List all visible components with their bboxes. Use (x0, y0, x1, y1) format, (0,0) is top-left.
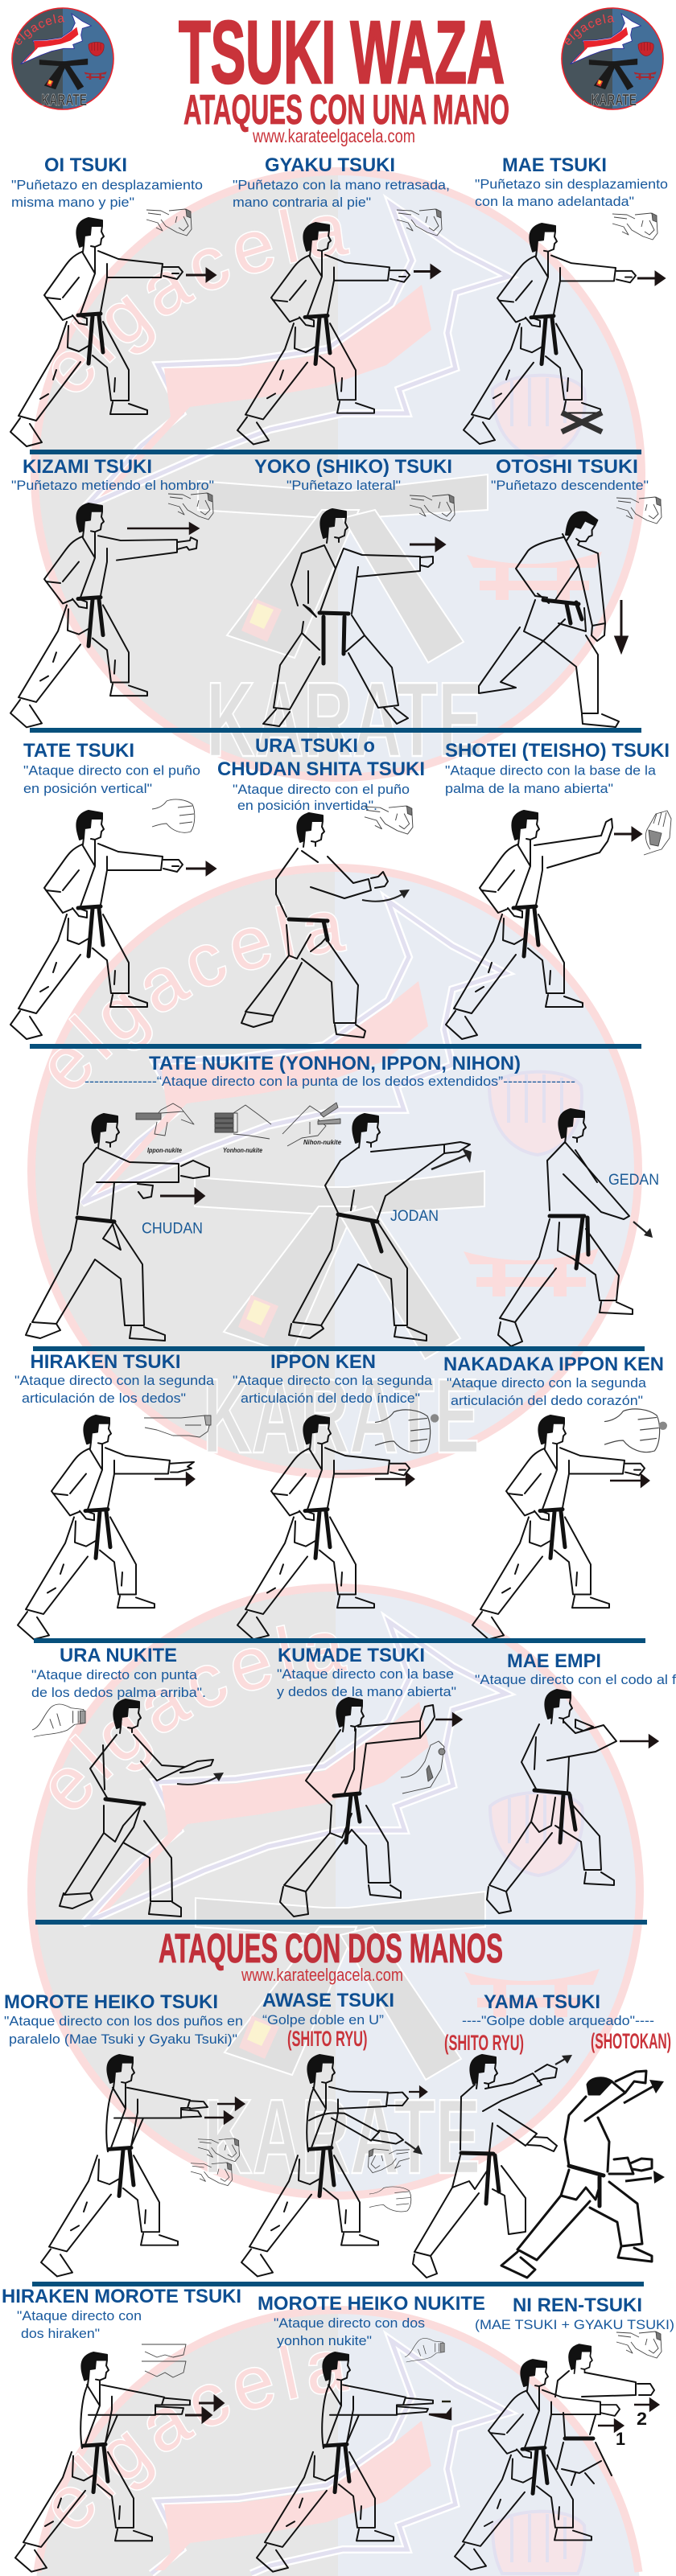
panel: MOROTE HEIKO NUKITE (257, 2293, 485, 2572)
heading: KUMADE TSUKI (278, 1645, 425, 1666)
panel: HIRAKEN MOROTE TSUKI (2, 2286, 241, 2572)
description: mano contraria al pie" (233, 195, 371, 210)
watermark 2 (27, 864, 642, 1478)
description: "Puñetazo sin desplazamiento (475, 177, 668, 191)
icon: palm (644, 811, 671, 855)
description: "Ataque directo con (17, 2308, 142, 2323)
icon: inverted fist (365, 806, 413, 834)
watermark 2: KARATE (203, 1357, 480, 1475)
heading: NAKADAKA IPPON KEN (443, 1354, 664, 1375)
figure (280, 1698, 435, 1917)
watermark 3 (27, 1584, 644, 2200)
description (4, 2014, 243, 2047)
description (277, 1666, 456, 1699)
figure (10, 503, 197, 727)
logo: right: elgacela (565, 14, 615, 45)
heading: TATE NUKITE (YONHON, IPPON, NIHON) (149, 1053, 521, 1074)
figure (60, 1699, 213, 1917)
description (23, 762, 200, 796)
heading: SHOTEI (TEISHO) TSUKI (445, 740, 670, 762)
icon: fist (612, 213, 657, 240)
panel: NI REN-TSUKI (455, 2295, 674, 2570)
panel: URA NUKITE (31, 1645, 224, 1917)
panel: OTOSHI TSUKI (479, 456, 662, 727)
figure (15, 2352, 190, 2572)
description: "Ataque directo con la segunda (14, 1373, 215, 1388)
panel: TATE TSUKI (10, 740, 215, 1039)
figure (241, 2055, 408, 2276)
arrow (614, 828, 641, 840)
description: yonhon nukite" (277, 2333, 372, 2348)
description: misma mano y pie" (11, 195, 134, 210)
panel: GYAKU TSUKI (233, 154, 450, 444)
panel: TATE NUKITE (26, 1053, 659, 1346)
label: Nihon-nukite (303, 1139, 342, 1146)
icon: fist (146, 209, 192, 236)
description: paralelo (Mae Tsuki y Gyaku Tsuki)" (9, 2032, 237, 2047)
description (31, 1667, 206, 1700)
watermark 4: elgacela (52, 2344, 351, 2529)
figure (241, 813, 388, 1037)
arrow (633, 1222, 653, 1238)
icon: kumade hand (401, 1741, 445, 1793)
website link: www.karateelgacela.com (241, 1965, 403, 1985)
icon: fist (397, 209, 442, 236)
heading: YAMA TSUKI (484, 1991, 600, 2013)
figure (41, 2055, 208, 2276)
arrow 1: 1 (616, 2429, 625, 2449)
watermark 1: elgacela (52, 207, 351, 392)
panel: AWASE TSUKI (241, 1990, 427, 2276)
logo: right (561, 7, 664, 110)
label: CHUDAN (142, 1221, 203, 1237)
description (11, 177, 203, 210)
arrow (616, 600, 627, 651)
arrow 2: 2 (637, 2409, 647, 2429)
description: "Ataque directo con el puño (233, 782, 410, 797)
description: ---------------“Ataque directo con la punta de los dedos extendidos”--------------- (84, 1074, 575, 1089)
arrow (362, 889, 410, 902)
heading: NI REN-TSUKI (513, 2295, 642, 2316)
heading: IPPON KEN (270, 1351, 376, 1373)
watermark 1: KARATE (206, 660, 483, 779)
heading: GYAKU TSUKI (265, 154, 395, 176)
heading: OTOSHI TSUKI (496, 456, 638, 478)
logo: right: KARATE (591, 91, 637, 109)
figure (472, 1415, 645, 1639)
heading: MOROTE HEIKO NUKITE (258, 2293, 485, 2315)
watermark 4 (34, 2306, 642, 2576)
description: "Ataque directo con la base (277, 1666, 454, 1682)
icons: fists (368, 2149, 411, 2212)
logo: left: elgacela (15, 14, 64, 45)
arrow (186, 863, 215, 874)
arrow (375, 1473, 414, 1485)
panel: URA TSUKI (217, 735, 425, 1037)
description (447, 1375, 647, 1408)
panel: MAE TSUKI (464, 154, 668, 444)
description: "Ataque directo con punta (31, 1667, 198, 1682)
figure (10, 218, 183, 446)
panel: IPPON KEN (233, 1351, 439, 1639)
arrow 1 (598, 2420, 625, 2449)
figure (263, 509, 433, 726)
icon: nakadaka hand (604, 1409, 667, 1452)
icons: hiraken hands (142, 2344, 186, 2377)
heading: CHUDAN SHITA TSUKI (217, 758, 425, 780)
arrow (435, 1714, 461, 1725)
heading: MAE TSUKI (502, 154, 607, 176)
panel: YOKO (SHIKO) TSUKI (254, 456, 455, 726)
icon: hiraken hand (144, 1415, 211, 1437)
figure (237, 1415, 410, 1639)
panel: MOROTE HEIKO TSUKI (4, 1991, 244, 2276)
panel: YAMA TSUKI (413, 1991, 671, 2278)
figure (446, 811, 612, 1039)
description: "Ataque directo con la base de la (445, 762, 657, 779)
heading: MOROTE HEIKO TSUKI (4, 1991, 218, 2013)
description: en posición invertida". (237, 798, 377, 813)
figure: chudan (26, 1114, 209, 1341)
icon: yonhon nukite (215, 1105, 271, 1139)
arrow (155, 1473, 194, 1485)
icon: fist (168, 493, 213, 520)
figure (479, 507, 619, 727)
panel: MAE EMPI (475, 1650, 676, 1913)
style label: (SHITO RYU) (287, 2027, 367, 2051)
description (14, 1373, 215, 1406)
watermark 3: KARATE (204, 2077, 480, 2196)
arrow (431, 1148, 472, 1169)
figure: shito ryu (413, 2055, 557, 2278)
description: con la mano adelantada" (475, 194, 634, 209)
description: "Ataque directo con la segunda (447, 1375, 647, 1391)
panel: KIZAMI TSUKI (10, 456, 214, 727)
panel: SHOTEI (TEISHO) TSUKI (445, 740, 671, 1039)
description (17, 2308, 142, 2341)
panel: KUMADE TSUKI (277, 1645, 461, 1917)
arrow (410, 539, 444, 550)
description: dos hiraken" (21, 2326, 100, 2341)
arrow (186, 269, 215, 281)
heading: TATE TSUKI (23, 740, 134, 762)
heading: KIZAMI TSUKI (23, 456, 152, 478)
watermark 2: elgacela (48, 904, 348, 1089)
arrows (185, 2397, 223, 2422)
description (445, 762, 657, 796)
figure: jodan (289, 1114, 470, 1341)
arrow (160, 1189, 204, 1202)
icon: ippon ken hand (375, 1410, 439, 1453)
figure (464, 224, 636, 444)
figure: gedan (498, 1109, 633, 1346)
arrow (414, 265, 439, 277)
label: Yonhon-nukite (223, 1147, 262, 1154)
arrows (429, 2401, 451, 2419)
description: articulación del dedo corazón" (451, 1393, 643, 1408)
arrows (405, 2087, 427, 2155)
description: "Ataque directo con el puño (23, 762, 200, 779)
description (233, 177, 450, 210)
label: JODAN (390, 1208, 439, 1225)
arrow (620, 1736, 657, 1747)
description: y dedos de la mano abierta" (277, 1684, 456, 1699)
description: palma de la mano abierta" (445, 781, 613, 796)
figure (10, 811, 183, 1039)
icons: fists (191, 2138, 240, 2186)
figure: shotokan (501, 2071, 652, 2278)
label: Ippon-nukite (147, 1147, 182, 1154)
icon: fist (616, 2332, 662, 2358)
icon: nihon nukite (282, 1103, 340, 1146)
heading: YOKO (SHIKO) TSUKI (254, 456, 452, 478)
description: "Puñetazo con la mano retrasada, (233, 177, 450, 193)
description: "Puñetazo lateral" (286, 478, 401, 493)
description (475, 177, 668, 209)
description: en posición vertical" (23, 781, 152, 796)
arrow (610, 1475, 649, 1486)
website link: www.karateelgacela.com (252, 125, 415, 146)
logo: left (11, 7, 114, 110)
watermark 3: elgacela (50, 1625, 348, 1810)
description: “Golpe doble en U” (262, 2012, 384, 2028)
heading: HIRAKEN MOROTE TSUKI (2, 2286, 241, 2307)
description: "Puñetazo en desplazamiento (11, 177, 203, 193)
description: de los dedos palma arriba". (31, 1685, 206, 1700)
figure (257, 2352, 433, 2572)
description: (MAE TSUKI + GYAKU TSUKI) (475, 2317, 674, 2332)
figure: back (555, 2344, 654, 2485)
icon: hand (405, 2338, 444, 2362)
icon: fist (616, 497, 662, 524)
panel: NAKADAKA IPPON KEN (443, 1354, 667, 1639)
figure: front (455, 2360, 620, 2570)
icon: cross mark (562, 413, 602, 432)
heading: HIRAKEN TSUKI (31, 1351, 180, 1373)
heading: URA NUKITE (60, 1645, 177, 1666)
arrow (127, 524, 198, 533)
arrows (204, 2098, 244, 2123)
heading (217, 735, 425, 780)
icon: hand (32, 1704, 85, 1737)
heading: URA TSUKI o (255, 735, 375, 757)
style label: (SHITO RYU) (444, 2031, 524, 2055)
icon: vertical fist (152, 799, 195, 832)
panel: OI TSUKI (10, 154, 215, 446)
arrow (637, 273, 664, 284)
description: "Ataque directo con el codo al f (475, 1672, 676, 1687)
figure (18, 1415, 194, 1639)
label: GEDAN (608, 1172, 659, 1189)
heading: MAE EMPI (507, 1650, 601, 1672)
icon: fist (410, 495, 455, 521)
description: "Ataque directo con los dos puños en (4, 2014, 243, 2028)
description (233, 1373, 433, 1406)
description (274, 2315, 425, 2348)
description: articulación de los dedos" (22, 1391, 186, 1406)
watermark 1 (31, 167, 645, 782)
figure (487, 1690, 616, 1913)
description: "Puñetazo metiendo el hombro" (11, 478, 214, 493)
description: "Puñetazo descendente" (491, 478, 649, 493)
icon: ippon nukite (136, 1103, 194, 1136)
description: "Ataque directo con dos (274, 2315, 425, 2331)
panel: HIRAKEN TSUKI (14, 1351, 215, 1639)
heading: AWASE TSUKI (262, 1990, 394, 2011)
description: ----"Golpe doble arqueado"---- (462, 2013, 654, 2028)
arrow (177, 1773, 224, 1785)
description: "Ataque directo con la segunda (233, 1373, 433, 1388)
arrows (624, 2080, 665, 2184)
heading: OI TSUKI (44, 154, 127, 176)
description: articulación del dedo índice" (241, 1391, 420, 1406)
figure (237, 223, 410, 444)
description (233, 782, 410, 813)
logo: left: KARATE (41, 91, 87, 109)
arrow 2 (634, 2399, 658, 2429)
arrow (555, 2055, 572, 2064)
